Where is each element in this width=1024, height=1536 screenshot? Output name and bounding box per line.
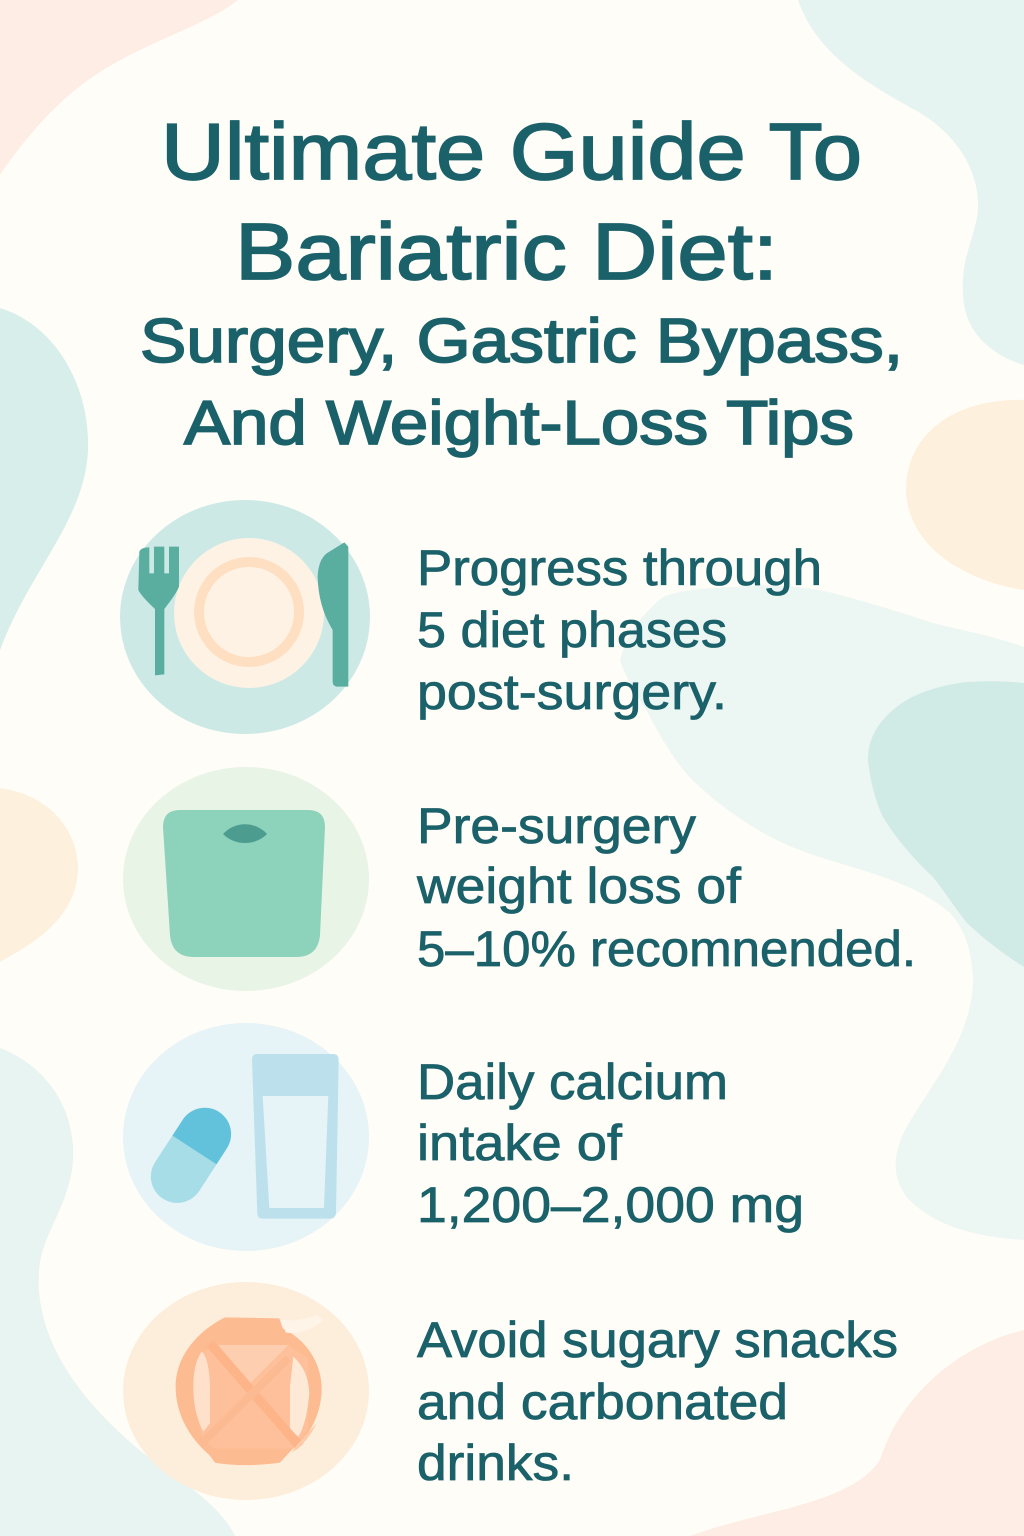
text: diet phases: post-surgery. (417, 664, 727, 720)
text: daily calcium: 1,200–2,000 mg (417, 1177, 804, 1233)
text: pre-surgery weight loss (416, 798, 916, 977)
icon: plate with fork and knife (120, 500, 370, 734)
text: daily calcium (417, 1054, 804, 1233)
text: avoid sugary snacks: Avoid sugary snacks (417, 1312, 898, 1368)
title: Surgery, Gastric Bypass, (140, 307, 903, 376)
text: daily calcium: intake of (417, 1115, 622, 1171)
text: daily calcium: Daily calcium (417, 1054, 728, 1110)
text: diet phases (417, 540, 822, 720)
icon: crossed-out sugary snack (123, 1282, 369, 1500)
text: pre-surgery weight loss: Pre-surgery (417, 798, 696, 854)
text: avoid sugary snacks: and carbonated (417, 1374, 788, 1430)
text: avoid sugary snacks: drinks. (417, 1435, 574, 1491)
title: Bariatric Diet: (235, 207, 778, 296)
title (140, 107, 903, 458)
title: Ultimate Guide To (161, 107, 862, 196)
icon: weighing scale (123, 767, 369, 991)
text: diet phases: Progress through (417, 540, 822, 596)
text: pre-surgery weight loss: 5–10% recomnended. (417, 921, 916, 977)
text: diet phases: 5 diet phases (417, 602, 727, 658)
text: pre-surgery weight loss: weight loss of (416, 858, 741, 914)
title: And Weight-Loss Tips (184, 389, 854, 458)
text: avoid sugary snacks (417, 1312, 898, 1491)
icon: calcium pill and glass of milk (123, 1023, 369, 1251)
